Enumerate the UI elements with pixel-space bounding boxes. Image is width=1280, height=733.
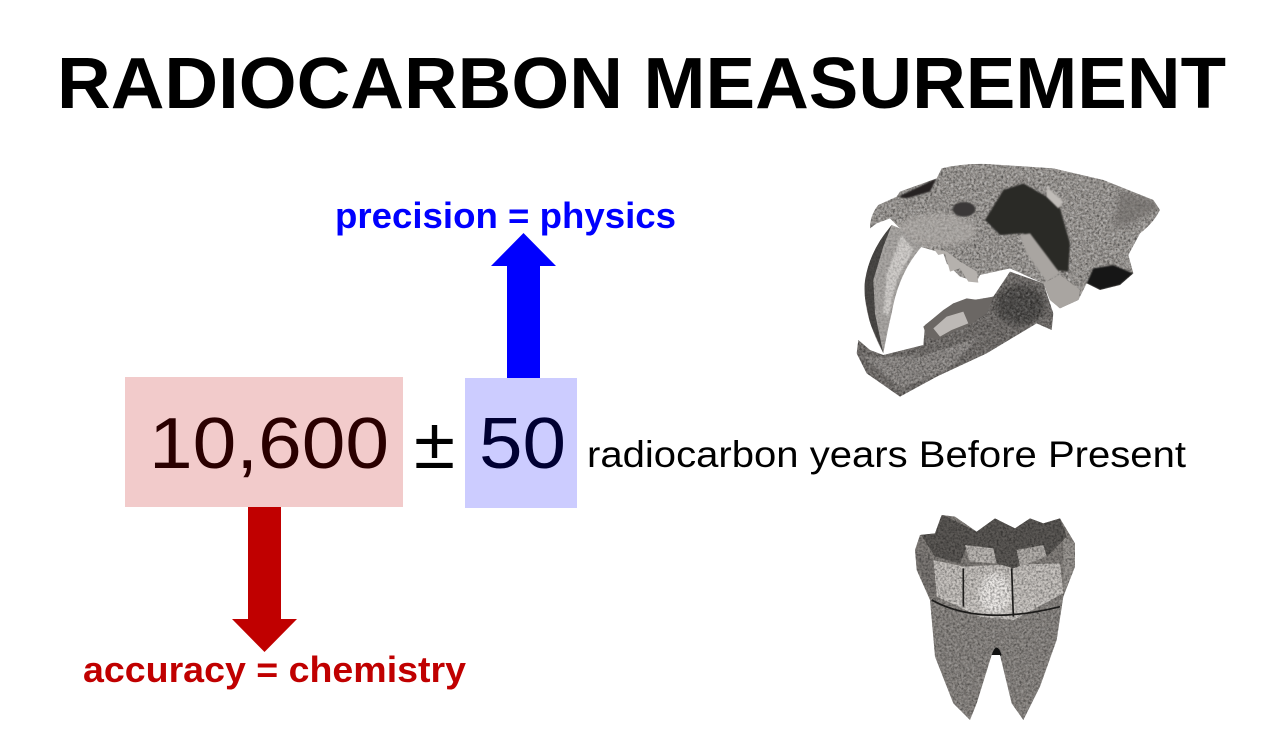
arrow: down to accuracy xyxy=(232,507,297,652)
upper teeth xyxy=(933,248,978,283)
accuracy label: accuracy = chemistry xyxy=(83,649,466,690)
plus-minus sign: ± xyxy=(414,404,455,484)
units text: radiocarbon years Before Present xyxy=(587,434,1187,475)
highlighted age value box xyxy=(125,377,403,507)
arrow: up to precision xyxy=(491,233,556,378)
highlighted uncertainty box xyxy=(465,378,577,508)
illustration: sabre-tooth skull xyxy=(855,160,1163,398)
lower jaw xyxy=(855,270,1055,398)
highlighted age value box: 10,600 xyxy=(149,404,389,484)
skull cranium xyxy=(863,160,1163,313)
precision label: precision = physics xyxy=(335,195,676,236)
sabre fang xyxy=(864,225,922,354)
illustration: molar tooth xyxy=(913,513,1077,723)
highlighted uncertainty box: 50 xyxy=(479,404,566,484)
lower teeth xyxy=(923,297,993,340)
title: RADIOCARBON MEASUREMENT xyxy=(57,44,1226,124)
